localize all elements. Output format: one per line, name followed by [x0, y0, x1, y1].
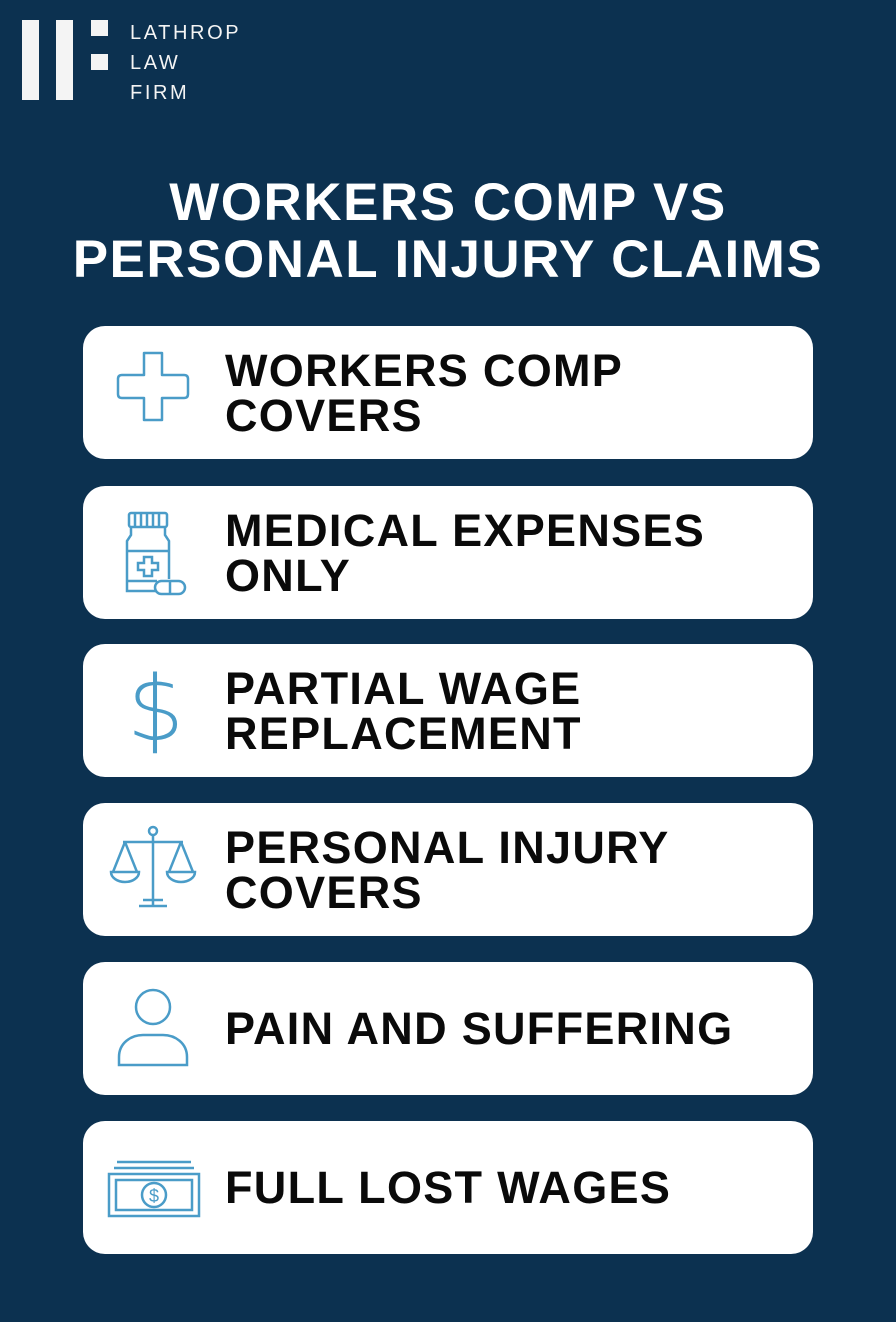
- card: partial wage: [83, 644, 813, 777]
- card: full lost wages: FULL LOST WAGES: [225, 1162, 671, 1213]
- card: personal injury covers: PERSONAL INJURY: [225, 822, 670, 872]
- logo: LATHROP: [130, 22, 241, 44]
- icon: pill bottle: [126, 512, 186, 596]
- card: medical expenses: ONLY: [225, 550, 351, 600]
- title: PERSONAL INJURY CLAIMS: [73, 230, 823, 289]
- card: full lost wages: [83, 1121, 813, 1254]
- icon: dollar: $: [127, 657, 184, 762]
- logo: LAW: [130, 52, 180, 74]
- card: medical expenses: MEDICAL EXPENSES: [225, 504, 705, 556]
- card: partial wage: PARTIAL WAGE: [225, 662, 581, 714]
- logo: FIRM: [130, 82, 189, 104]
- card: partial wage: REPLACEMENT: [225, 708, 582, 758]
- icon: scales: [110, 826, 196, 908]
- icon: cross: [116, 352, 190, 422]
- card: workers comp covers: [83, 326, 813, 459]
- card: workers comp covers: WORKERS COMP: [225, 344, 623, 396]
- logo: [22, 20, 241, 104]
- card: pain and suffering: PAIN AND SUFFERING: [225, 1003, 733, 1054]
- title: WORKERS COMP VS: [169, 173, 727, 232]
- card: pain and suffering: [83, 962, 813, 1095]
- card: personal injury covers: [83, 803, 813, 936]
- card: personal injury covers: COVERS: [225, 866, 423, 918]
- title: [73, 173, 823, 289]
- icon: cash: [108, 1160, 200, 1218]
- card: workers comp covers: COVERS: [225, 390, 423, 440]
- icon: cash: $: [149, 1186, 159, 1206]
- icon: person: [118, 988, 188, 1066]
- card: medical expenses: [83, 486, 813, 619]
